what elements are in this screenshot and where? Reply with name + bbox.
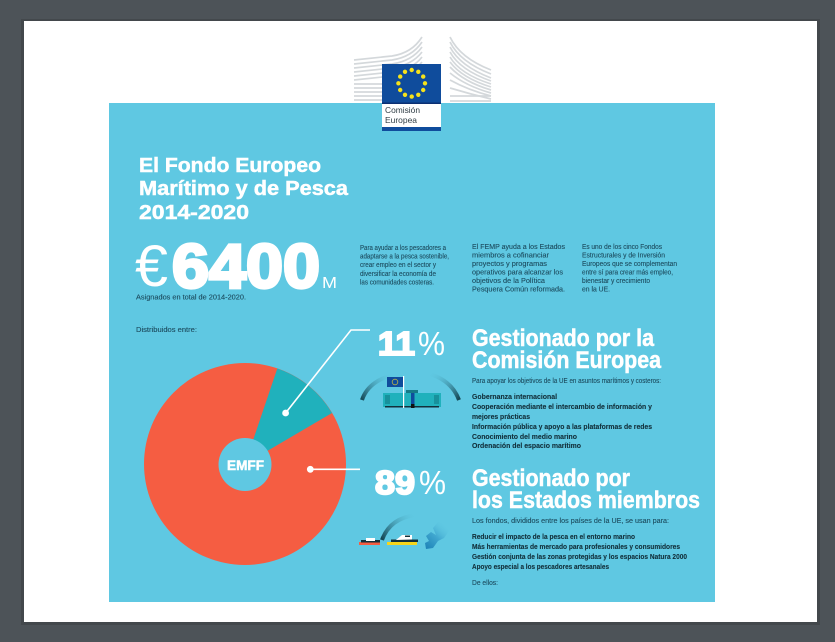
title: El Fondo Europeo <box>139 154 321 177</box>
leader line: 11 percent <box>282 330 370 416</box>
text block: column 2: Pesquera Común reformada. <box>472 286 565 294</box>
icon: Commission building and flag <box>362 374 459 408</box>
list: Commission actions <box>472 394 652 450</box>
headline figure: 6400 million euros: 6400 <box>172 232 320 302</box>
text block: column 3: en la UE. <box>582 286 610 294</box>
text block: column 2: objetivos de la Política <box>472 278 545 285</box>
stat: 89 percent: % <box>419 464 446 501</box>
icon: Berlaymont building <box>354 37 491 101</box>
headline figure: 6400 million euros: M <box>322 275 337 292</box>
list: member states actions: Gestión conjunta de las zonas protegidas y los espacios Natura 2000 <box>472 554 687 561</box>
text block: column 3: bienestar y crecimiento <box>582 278 650 285</box>
text block: column 1: Para ayudar a los pescadores a <box>360 245 446 252</box>
logo: Comisión Europea <box>382 64 441 131</box>
text block: column 3: entre sí para crear más empleo, <box>582 270 673 276</box>
caption: allocated total: Asignados en total de 2014-2020. <box>136 294 246 302</box>
logo: Comisión Europea: Europea <box>385 115 417 125</box>
text block: column 1: adaptarse a la pesca sostenible, <box>360 254 449 260</box>
heading: managed by the Commission: Comisión Europea <box>472 347 662 374</box>
text block: column 2: miembros a cofinanciar <box>472 252 550 260</box>
stat: 89 percent: 89 <box>375 464 415 501</box>
text block: column 2 <box>472 244 565 294</box>
heading: managed by the Commission <box>472 325 662 374</box>
title <box>139 154 349 224</box>
headline figure: 6400 million euros: € <box>135 234 168 299</box>
list: Commission actions: Información pública y apoyo a las plataformas de redes <box>472 424 652 431</box>
heading: managed by member states <box>472 465 700 514</box>
text block: column 1 <box>360 245 449 286</box>
icon: small boat <box>359 538 380 545</box>
list: Commission actions: mejores prácticas <box>472 414 530 421</box>
pie chart: EMFF split <box>144 363 346 565</box>
heading: managed by the Commission: Gestionado por la <box>472 325 655 352</box>
text block: member states intro: Los fondos, divididos entre los países de la UE, se usan para: <box>472 518 669 525</box>
text block: column 3 <box>582 244 677 294</box>
heading: managed by member states: los Estados miembros <box>472 487 700 514</box>
text block: column 2: El FEMP ayuda a los Estados <box>472 244 565 251</box>
list: member states actions: Más herramientas de mercado para profesionales y consumidores <box>472 544 680 551</box>
title: 2014-2020 <box>139 201 249 224</box>
icon: stars <box>396 68 427 99</box>
caption: of which: De ellos: <box>472 580 498 587</box>
caption: distributed between: Distribuidos entre: <box>136 327 197 334</box>
list: member states actions: Reducir el impacto de la pesca en el entorno marino <box>472 534 635 541</box>
leader line: 89 percent <box>307 466 360 473</box>
text block: column 1: las comunidades costeras. <box>360 280 434 286</box>
list: Commission actions: Conocimiento del medio marino <box>472 434 577 441</box>
text block: column 2: proyectos y programas <box>472 261 548 268</box>
icon: Europe map <box>425 519 452 549</box>
text block: column 1: diversificar la economía de <box>360 271 436 278</box>
list: Commission actions: Cooperación mediante el intercambio de información y <box>472 404 652 411</box>
pie chart: EMFF split: EMFF <box>227 457 264 473</box>
text block: column 3: Es uno de los cinco Fondos <box>582 244 662 251</box>
icon: boats and Europe map <box>359 515 452 549</box>
panel: blue background <box>109 103 715 602</box>
text block: column 2: operativos para alcanzar los <box>472 270 564 276</box>
headline figure: 6400 million euros <box>135 232 337 302</box>
list: member states actions <box>472 534 687 571</box>
text block: column 1: crear empleo en el sector y <box>360 262 436 269</box>
logo: Comisión Europea: Comisión <box>385 105 420 115</box>
icon: large boat <box>387 535 418 545</box>
text block: Commission intro: Para apoyar los objetivos de la UE en asuntos marítimos y costeros: <box>472 378 661 385</box>
stat: 89 percent <box>375 464 446 501</box>
list: Commission actions: Gobernanza internacional <box>472 394 557 401</box>
stat: 11 percent: % <box>418 325 445 362</box>
title: Marítimo y de Pesca <box>139 177 349 200</box>
list: Commission actions: Ordenación del espacio marítimo <box>472 443 581 450</box>
list: member states actions: Apoyo especial a los pescadores artesanales <box>472 564 609 571</box>
text block: column 3: Estructurales y de Inversión <box>582 252 665 260</box>
text block: column 3: Europeos que se complementan <box>582 261 677 268</box>
stat: 11 percent: 11 <box>378 325 415 362</box>
heading: managed by member states: Gestionado por <box>472 465 630 492</box>
stat: 11 percent <box>378 325 445 362</box>
